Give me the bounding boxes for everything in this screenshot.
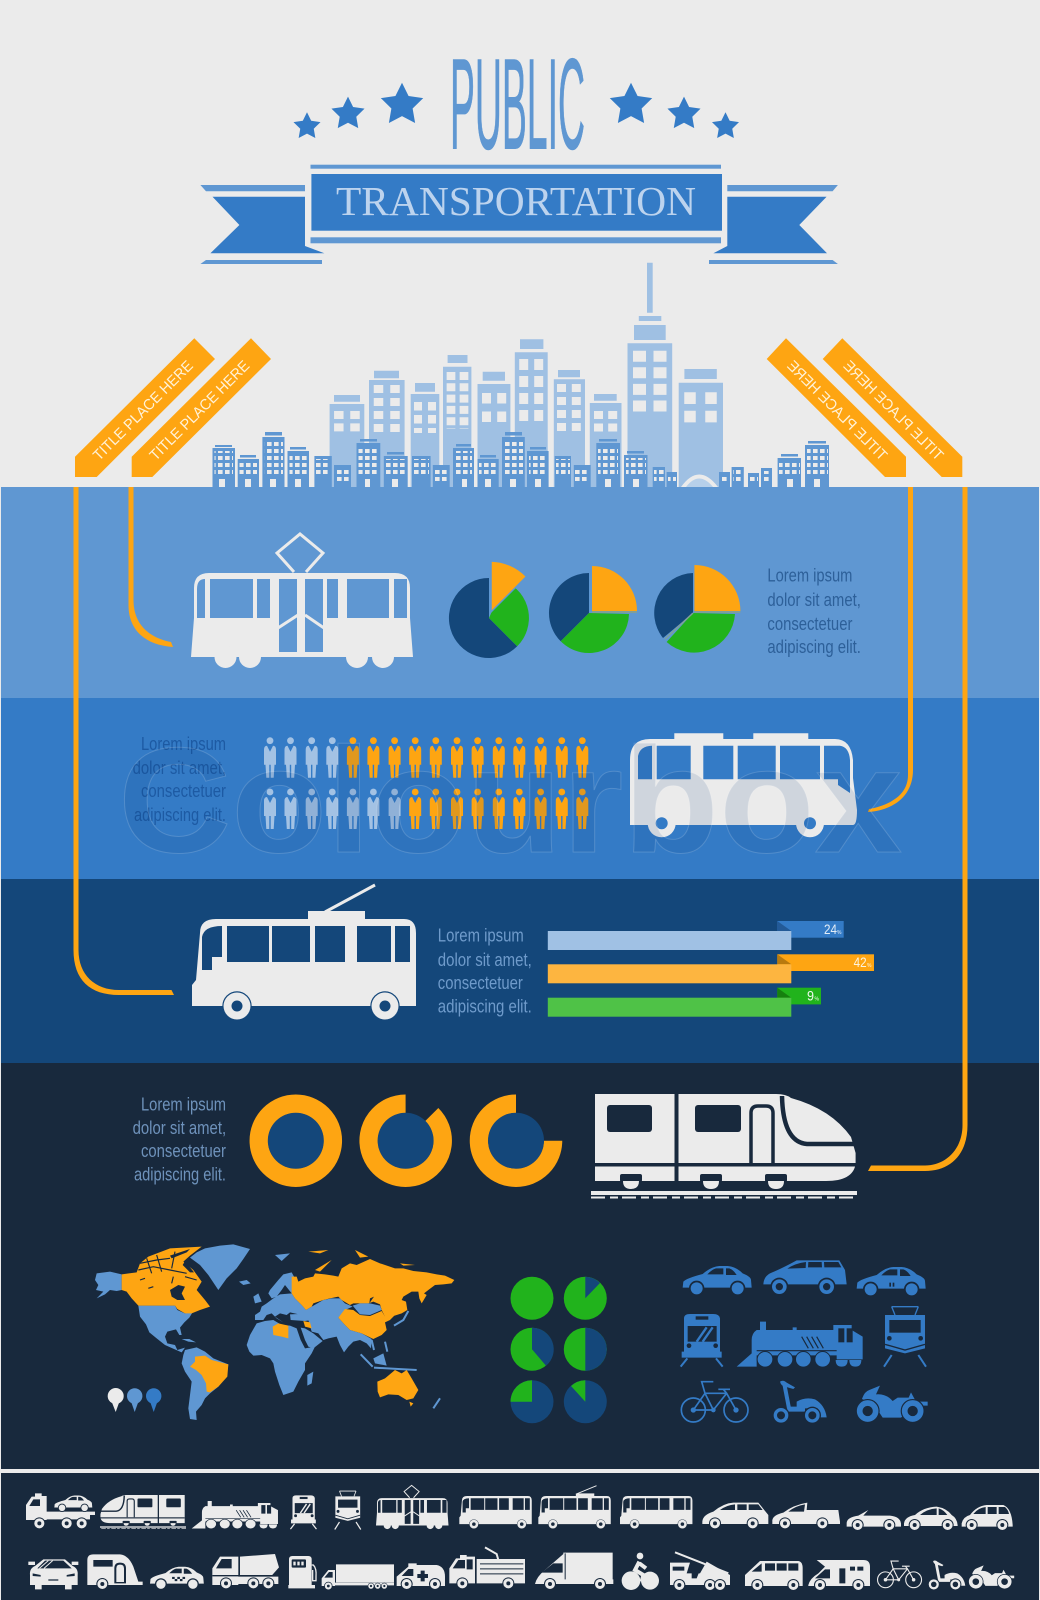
icon: motorcycle	[968, 1565, 1014, 1589]
icon: bicycle	[681, 1382, 748, 1422]
icon: fire truck	[449, 1547, 525, 1589]
bar: 42: 42	[854, 954, 867, 970]
icon: camper	[808, 1560, 870, 1591]
text block: band 1: Lorem ipsum	[767, 566, 852, 586]
ribbon banner	[200, 165, 838, 264]
icon: front car	[28, 1559, 78, 1589]
connector: tag to train	[868, 487, 968, 1171]
pie: quarter green	[510, 1380, 554, 1423]
bar: 9: 9	[807, 988, 814, 1004]
pie 2	[549, 566, 637, 653]
text block: band 2	[133, 734, 226, 825]
stars	[293, 83, 739, 138]
pie: half navy	[564, 1328, 607, 1371]
connector: tag to tram	[128, 487, 173, 647]
text block: band 4: adipiscing elit.	[134, 1165, 226, 1185]
pie: 40 percent navy	[510, 1328, 554, 1371]
icon: wagon	[702, 1503, 768, 1529]
bar: 42	[548, 954, 874, 983]
icon: ambulance	[397, 1563, 445, 1590]
orange tag: title right 2 (mirrored): TITLE PLACE HERE	[840, 357, 947, 464]
bottom icon panel background	[1, 1473, 1039, 1600]
icon: convertible	[847, 1510, 901, 1531]
pie 1	[449, 561, 529, 658]
text block: band 4	[133, 1095, 226, 1185]
icon: minivan	[962, 1505, 1013, 1531]
icon: fuel pump	[288, 1556, 316, 1588]
bar chart	[548, 921, 874, 1017]
icon: pickup	[772, 1503, 840, 1529]
icon: electric train front	[335, 1491, 361, 1529]
text block: band 2: dolor sit amet,	[133, 758, 226, 778]
icon: electric train front	[884, 1307, 926, 1367]
icon: steam locomotive	[192, 1501, 278, 1529]
icon: bullet train	[591, 1094, 857, 1198]
text block: band 3	[438, 926, 532, 1017]
icon: bus	[459, 1496, 532, 1529]
text block: band 2: Lorem ipsum	[141, 734, 226, 754]
watermark: Colourbox	[118, 716, 902, 884]
icon: bicycle	[878, 1561, 922, 1588]
icon: car	[683, 1266, 752, 1296]
icon: bus	[630, 733, 857, 837]
donut charts	[259, 1104, 553, 1178]
bar: 24	[548, 921, 844, 950]
connector: tag to bus	[868, 487, 913, 812]
icon: tram front	[290, 1495, 316, 1529]
icon: cyclist	[622, 1553, 659, 1590]
pictogram chart: people row 1	[264, 737, 588, 778]
icon: crane truck	[670, 1552, 730, 1591]
pictogram chart: people row 2	[264, 789, 588, 829]
pie 3	[654, 565, 740, 653]
bar: 42: %	[867, 963, 872, 969]
icon: minibus	[745, 1561, 803, 1591]
orange tag: title right 2 (mirrored)	[823, 338, 962, 477]
blue vehicle icons	[681, 1260, 928, 1424]
bar: 24: 24	[824, 921, 837, 937]
donut 3	[479, 1104, 553, 1178]
text block: band 2: adipiscing elit.	[134, 805, 226, 825]
pie: small navy slice	[564, 1277, 607, 1320]
text block: band 1	[767, 566, 861, 657]
icon: trolleybus	[538, 1486, 611, 1529]
icon: tow truck	[26, 1493, 95, 1529]
text block: band 2: consectetuer	[141, 781, 226, 801]
text block: band 1: dolor sit amet,	[767, 590, 861, 610]
world map	[95, 1244, 454, 1420]
text block: band 4: dolor sit amet,	[133, 1118, 226, 1138]
icon: SUV	[763, 1260, 847, 1296]
text block: band 1: consectetuer	[767, 614, 852, 634]
text block: band 4: consectetuer	[141, 1141, 226, 1161]
text block: band 3: Lorem ipsum	[438, 926, 524, 946]
donut 1	[259, 1104, 333, 1178]
orange tag: title left 1	[75, 338, 215, 477]
icon: motorcycle	[856, 1386, 928, 1423]
text block: band 4: Lorem ipsum	[141, 1095, 226, 1115]
orange tag: title left 1: TITLE PLACE HERE	[90, 357, 197, 464]
bar: 9: %	[814, 996, 820, 1002]
icon: dump truck	[212, 1554, 279, 1589]
orange tag: title left 2	[132, 338, 271, 477]
pie: small green slice	[564, 1380, 607, 1423]
icon: scooter	[928, 1560, 965, 1590]
pie charts: tram band	[449, 561, 740, 658]
icon: scooter	[772, 1381, 827, 1424]
map: Europe, Africa, Asia, Oceania	[247, 1250, 454, 1408]
infographic canvas: PUBLIC	[450, 32, 585, 176]
icon: steam locomotive	[737, 1322, 863, 1368]
bar: 24: %	[837, 930, 842, 936]
orange tag: title right 1 (mirrored): TITLE PLACE HERE	[783, 357, 890, 464]
band 3 background	[1, 879, 1039, 1063]
icon: bullet train	[100, 1495, 186, 1528]
orange tag: title left 2: TITLE PLACE HERE	[146, 357, 253, 464]
icon: coach	[620, 1496, 692, 1529]
band 1 background	[1, 487, 1039, 698]
green and navy pie grid	[510, 1277, 607, 1423]
title: TRANSPORTATION: TRANSPORTATION	[336, 178, 696, 224]
bottom icon strip right	[535, 1486, 1014, 1591]
map: Americas	[95, 1244, 251, 1420]
city skyline	[212, 263, 829, 487]
text block: band 1: adipiscing elit.	[767, 637, 861, 657]
band 2 background	[1, 698, 1039, 879]
icon: hatchback	[857, 1267, 926, 1297]
donut 2	[369, 1104, 443, 1178]
text block: band 3: dolor sit amet,	[438, 950, 532, 970]
icon: tram	[191, 534, 413, 668]
text block: band 3: adipiscing elit.	[438, 997, 532, 1017]
icon: sedan	[904, 1507, 958, 1531]
icon: tram	[376, 1485, 449, 1529]
icon: trolleybus	[192, 885, 416, 1021]
bottom icon strip left	[26, 1485, 532, 1590]
icon: taxi	[150, 1567, 204, 1590]
connector: tag to trolleybus	[74, 487, 174, 995]
text block: band 3: consectetuer	[438, 973, 523, 993]
orange tag: title right 1 (mirrored)	[767, 338, 906, 477]
map legend pins	[108, 1388, 161, 1412]
bar: 9	[548, 988, 821, 1017]
icon: truck	[322, 1564, 394, 1590]
band 4 background	[1, 1063, 1039, 1469]
icon: delivery van	[535, 1553, 613, 1590]
icon: caravan	[87, 1554, 143, 1590]
pie: full	[510, 1277, 554, 1320]
icon: tram front	[681, 1314, 723, 1367]
